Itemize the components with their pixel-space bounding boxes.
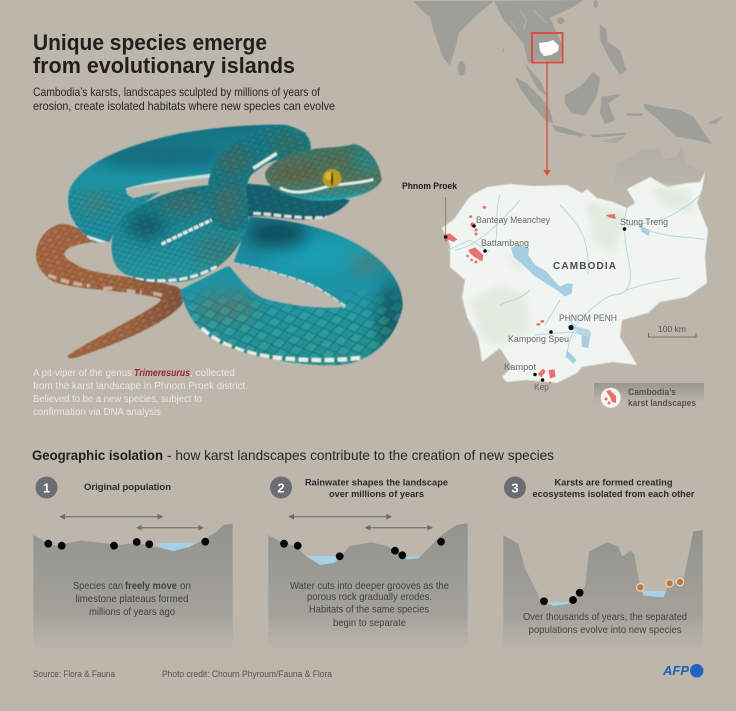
title: Unique species emerge xyxy=(33,30,267,55)
snake photo illustration xyxy=(27,123,410,370)
snake: head xyxy=(263,142,383,203)
step number 2 xyxy=(270,476,292,498)
text 3 xyxy=(523,611,687,636)
text 1: freely move xyxy=(125,580,177,592)
snake caption: Believed to be a new species, subject to xyxy=(33,394,202,405)
snake caption: Trimeresurus xyxy=(134,368,190,379)
place labels xyxy=(402,181,668,393)
terrain 3 xyxy=(503,530,703,650)
section heading: - how karst landscapes contribute to the creation of new species xyxy=(167,447,554,463)
locator box xyxy=(532,33,562,62)
text 1 xyxy=(73,580,191,618)
legend: karst landscapes: karst landscapes xyxy=(628,398,696,408)
text 1: millions of years ago xyxy=(89,606,175,618)
place labels: PHNOM PENH xyxy=(559,313,617,324)
country highlight: Cambodia in locator box xyxy=(539,40,559,56)
scale bar: 100 km xyxy=(658,324,686,334)
place labels: Kampong Speu xyxy=(508,334,569,345)
snake caption: confirmation via DNA analysis xyxy=(33,407,161,418)
arrow to Cambodia map xyxy=(543,63,551,176)
title: from evolutionary islands xyxy=(33,53,295,78)
text 3: populations evolve into new species xyxy=(528,624,682,636)
panel 1: original population xyxy=(33,476,233,650)
snake: band under head xyxy=(243,183,350,220)
snake: neck xyxy=(208,126,312,230)
forest patches xyxy=(470,185,695,345)
text 1: limestone plateaus formed xyxy=(76,593,189,605)
subtitle: erosion, create isolated habitats where new species can evolve xyxy=(33,99,335,113)
heading 2 xyxy=(305,478,448,500)
place labels: Kampot xyxy=(504,362,536,373)
step number 3: 3 xyxy=(511,480,519,496)
snake: brown tail xyxy=(35,224,184,360)
snake caption: from the karst landscape in Phnom Proek district. xyxy=(33,381,248,392)
place labels: Battambang xyxy=(481,238,529,249)
snake: front coil xyxy=(110,184,246,284)
subtitle xyxy=(33,85,335,113)
step number 1 xyxy=(36,476,58,498)
heading 2: Rainwater shapes the landscape xyxy=(305,478,448,488)
heading 2: over millions of years xyxy=(329,489,424,500)
heading 3: ecosystems isolated from each other xyxy=(532,489,695,500)
place labels: Kep xyxy=(534,382,549,393)
title xyxy=(33,30,295,78)
snake caption xyxy=(33,368,248,418)
heading 1: Original population xyxy=(84,482,171,493)
land: Cambodia xyxy=(442,172,708,383)
snake: top body band xyxy=(60,123,313,247)
range arrows 1 xyxy=(59,514,204,530)
text 3: Over thousands of years, the separated xyxy=(523,611,687,623)
black population dots 3 xyxy=(540,589,584,605)
Cambodia map xyxy=(402,172,708,393)
photo credit: Photo credit: Chourn Phyroum/Fauna & Flora xyxy=(162,669,332,679)
terrain 1 xyxy=(33,523,233,650)
step number 2: 2 xyxy=(277,480,285,496)
text 2: Habitats of the same species xyxy=(309,604,429,616)
legend: karst landscapes: Cambodia’s xyxy=(628,387,676,397)
text 2: porous rock gradually erodes. xyxy=(307,591,432,603)
place labels: Phnom Proek xyxy=(402,181,458,192)
place labels: Stung Treng xyxy=(620,217,668,228)
snake caption: , collected xyxy=(190,368,235,379)
place labels: Banteay Meanchey xyxy=(476,215,550,226)
legend: karst landscapes xyxy=(594,383,704,408)
heading 3 xyxy=(532,478,695,500)
heading 3: Karsts are formed creating xyxy=(554,478,673,488)
text 2: begin to separate xyxy=(333,617,406,629)
panel 3: isolated ecosystems xyxy=(503,476,703,650)
city markers xyxy=(444,224,626,382)
text 2: Water cuts into deeper grooves as the xyxy=(290,580,449,592)
text 2 xyxy=(290,580,449,629)
population dots 2 xyxy=(280,538,445,560)
leader line: Phnom Proek xyxy=(445,197,447,236)
locator map: Southeast Asia xyxy=(413,0,722,193)
snake caption: A pit-viper of the genus xyxy=(33,368,132,379)
AFP logo: AFP xyxy=(662,664,690,678)
range arrows 2 xyxy=(288,514,433,530)
scale bar xyxy=(648,324,696,337)
place labels: CAMBODIA xyxy=(553,261,616,272)
text 1: on xyxy=(180,580,191,592)
section heading: Geographic isolation xyxy=(32,447,163,463)
step number 3 xyxy=(504,476,526,498)
panel 2: rainwater xyxy=(268,476,468,650)
new species dots xyxy=(637,578,684,591)
Tonle Sap lake xyxy=(511,225,650,364)
population dots 1 xyxy=(44,538,209,550)
terrain 2 xyxy=(268,523,468,650)
AFP logo xyxy=(662,664,703,678)
rivers xyxy=(448,195,705,358)
subtitle: Cambodia’s karsts, landscapes sculpted by millions of years of xyxy=(33,85,321,99)
karst landscape patches xyxy=(443,206,616,384)
text 1: Species can xyxy=(73,580,123,592)
step number 1: 1 xyxy=(43,480,50,496)
snake: large lower coil xyxy=(173,213,410,370)
source: Source: Flora & Fauna xyxy=(33,669,115,679)
